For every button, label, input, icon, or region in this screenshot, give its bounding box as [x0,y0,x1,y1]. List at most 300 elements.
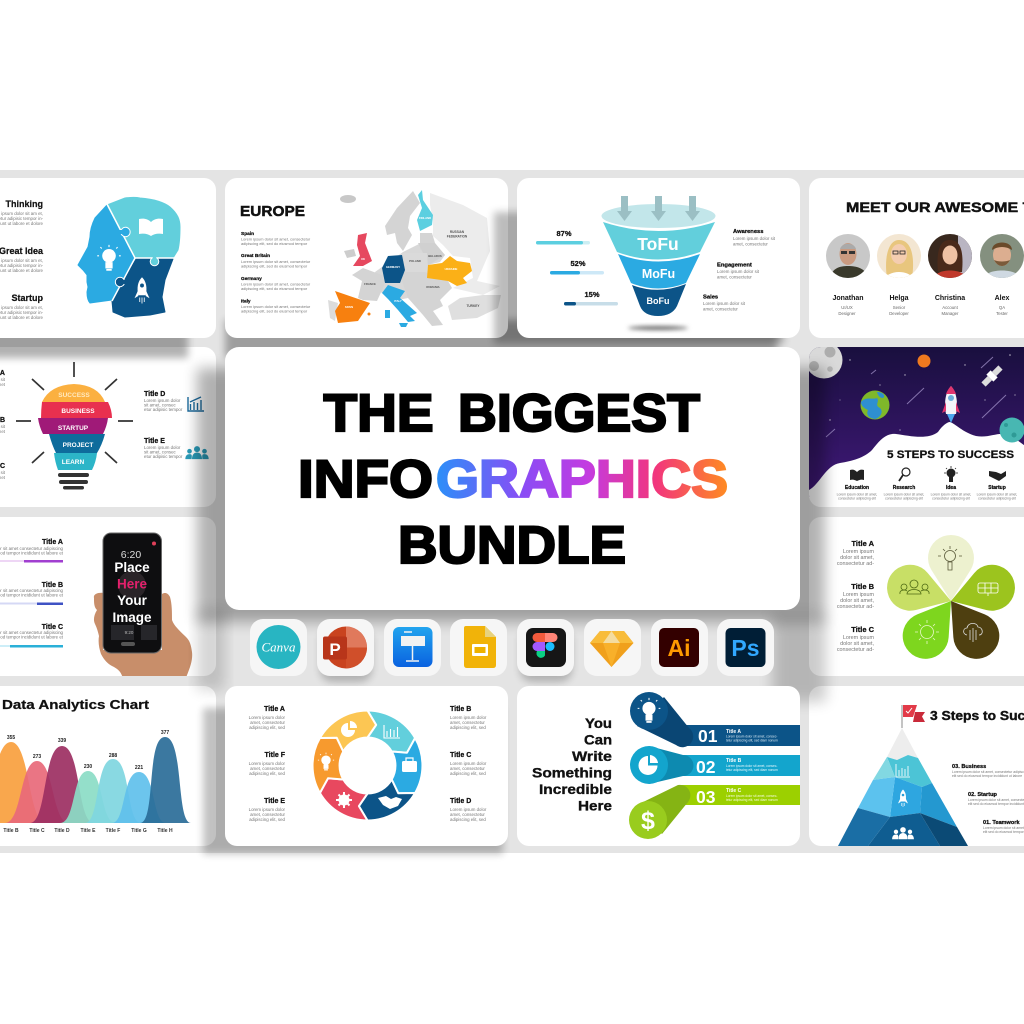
ribbon 03: $ [641,807,655,835]
text: spain [241,231,311,246]
axis labels: Title D [54,828,70,834]
scandinavia [385,191,420,251]
text: great britain: Lorem ipsum dolor sit amet, consectetur [241,259,311,264]
text: germany: Lorem ipsum dolor sit amet, consectetur [241,282,311,286]
text: title A: Lorem ipsum dolor [249,715,286,720]
text: title B: Lorem ipsum dolor [450,715,487,720]
text: title F [249,752,286,776]
text: awareness: Awareness [733,229,764,235]
funnel band: bofu: BoFu [646,296,670,306]
arrows [617,196,700,221]
step: startup: consectetur adipiscing elit [978,496,1016,500]
bulb layer: business [41,402,112,418]
portrait: christina [928,234,972,278]
text: title A: amet, consectetur [250,720,286,725]
axis labels: Title B [3,828,19,834]
headline text: Can [584,732,612,748]
text: awareness: Lorem ipsum dolor sit [733,236,776,241]
country labels [345,216,480,309]
text: title E [249,798,286,822]
planet: orange [918,354,930,368]
step: education [837,470,877,500]
value labels: 221 [135,765,143,771]
turkey [448,295,501,320]
icon: sun [915,620,939,644]
team roles: Developer [889,311,909,316]
value labels: 377 [161,730,169,736]
ribbon 02: 02 [696,757,716,777]
panel: team [809,178,1024,338]
text: title E: Lorem ipsum dolor [249,807,286,812]
text: engagement: amet, consectetur [717,274,752,280]
icon: team [900,580,929,594]
funnel band: mofu: MoFu [642,267,675,281]
icon: idea [938,546,962,570]
text: spain: adipiscing elit, sed do eiusmod tempor [241,241,308,246]
portrait: alex [980,234,1024,278]
text: title C: amet, consectetur [450,766,485,771]
ribbon 02 [630,746,800,784]
text: title B: Title B [851,582,875,591]
step: startup [977,471,1017,500]
progress: 52% [550,259,604,274]
country labels: UK [361,257,365,261]
icon: bar chart [188,397,204,411]
title line 2: gradient part: GRAPHICS [436,450,728,509]
phone body [103,533,162,653]
ukraine [427,256,472,286]
map of europe [328,190,501,327]
country labels: FINLAND [419,216,431,220]
funnel band: tofu [603,222,715,260]
bulb layer: project: PROJECT [63,442,93,449]
text: title B: dolor sit amet, [840,598,874,604]
phone screen text: Your [117,593,148,608]
panel: main title [225,347,800,610]
text: title D: etur adipisic tempor [144,407,183,412]
text: title D: Lorem ipsum dolor [450,807,487,812]
mountain [838,728,968,846]
step: education: Lorem ipsum dolor sit amet, [837,492,877,496]
icon: people [185,446,209,459]
poland and central [403,253,428,278]
panel: space steps [806,342,1024,510]
funnel top ellipse [602,204,716,228]
ribbon 02: Lorem ipsum dolor sit amet, consec- [726,764,777,768]
team roles: Senior [893,305,906,310]
text: title A: Title A [264,706,285,713]
text: title C [450,752,487,776]
planet: teal [1000,418,1024,442]
icon: canva [250,619,307,676]
country labels: FRANCE [364,282,376,286]
text: sales: Lorem ipsum dolor sit [703,301,746,306]
phone screen text: 9:20 [125,630,134,635]
icon: bulb [318,753,334,770]
blue tier [890,777,922,817]
text: business: elit sed do eiusmod tempor incididunt ut labore [952,774,1022,778]
axis labels: Title F [106,828,120,834]
text: italy: Italy [241,298,251,304]
icon: line chart [384,725,400,738]
text: startup [0,293,44,320]
icon: rocket [898,790,908,807]
text: title C: Title C [450,752,471,759]
funnel band: tofu: ToFu [637,234,679,254]
country labels: UKRAINE [445,267,458,271]
text: title B: Title B [450,706,471,713]
icon: handshake [378,796,402,809]
rocket [942,386,960,423]
panel: head puzzle [0,178,216,338]
text: thinking: Thinking [6,199,43,209]
head diagram [78,197,180,317]
country labels: GERMANY [386,265,400,269]
hand holding phone [94,533,192,680]
step: startup: Startup [988,485,1006,491]
text: teamwork: elit sed do eiusmod tempor [983,830,1024,834]
ribbon 01: Title A [726,729,741,735]
text: title E: etur adipisic tempor [144,454,183,459]
text: title A: adipiscing elit, sed [249,725,286,730]
icon: rocket [134,277,150,304]
text: germany [241,276,311,291]
ribbon 01: Lorem ipsum dolor sit amet, consec- [726,734,777,738]
icon: gear [336,792,352,808]
icon: solar panel [978,583,998,596]
planet: earth [860,390,890,420]
ribbon 02: tetur adipiscing elit, sed diam nonum [726,768,778,772]
phone screen text: Image [112,610,152,625]
ribbon 03: tetur adipiscing elit, sed diam nonum [726,798,778,802]
bulb layer: learn [54,453,97,470]
ribbon 02: Title B [726,758,742,764]
icon: powerpoint: P [329,640,341,659]
text: great idea [0,246,44,273]
funnel band: bofu [632,284,686,316]
text: title A [0,539,64,562]
text: germany: adipiscing elit, sed do eiusmod tempor [241,286,308,291]
heading: Data Analytics Chart [2,697,150,712]
text: title F: adipiscing elit, sed [249,771,286,776]
text: title E: sit amet, consec [144,450,177,454]
funnel band: mofu [618,254,700,288]
icon: powerpoint [317,619,374,676]
axis labels: Title E [81,828,96,834]
phone screen text [111,542,157,646]
snow cap [887,728,918,760]
team roles: Designer [838,311,856,316]
ireland [344,249,356,258]
step: idea: consectetur adipiscing elit [932,496,970,500]
text: title C: consectetur ad- [837,647,874,653]
portugal [328,300,338,321]
step: research [884,468,924,500]
text: spain: Spain [241,231,254,237]
bulb layer: startup [38,418,108,434]
text: title B: Title B [42,582,63,589]
title line 1: BIGGEST [458,384,700,443]
team roles: Manager [942,311,959,316]
text: title A: Lorem ipsum [843,549,874,555]
russia [430,193,500,295]
text: title C: Title C [851,625,875,634]
white hill [809,422,1024,497]
spain [335,291,370,323]
text: germany: Germany [241,276,262,282]
icon: keynote [384,619,441,676]
panel: 3 steps mountain [809,686,1024,846]
belarus [418,243,445,266]
text: title E [144,438,183,459]
text: title D: amet, consectetur [450,812,485,817]
petals [881,535,1021,668]
title line 1 [324,384,700,443]
text: title A [837,539,875,567]
axis labels [3,828,173,834]
text: title C [0,624,64,648]
country labels: RUSSIAN [450,230,465,234]
text: engagement: Lorem ipsum dolor sit [717,269,760,274]
bulb layer: project [49,434,105,453]
text: great idea: Great Idea [0,246,44,256]
text: sales [703,294,746,312]
navy tier [868,813,940,846]
text: title C: dolor sit amet, [840,641,874,647]
title line 1: THE [324,384,434,443]
country labels: SPAIN [345,305,353,309]
progress: 15%: 15% [584,290,600,299]
text: startup: 02. Startup [968,792,997,798]
portrait: helga [877,234,921,278]
ribbon 03 [629,785,800,839]
text: title D: Title D [144,391,165,398]
icon: book [139,219,163,236]
text: italy: adipiscing elit, sed do eiusmod tempor [241,308,308,314]
ribbon 03: Lorem ipsum dolor sit amet, consec- [726,794,777,798]
team roles: Tester [996,311,1008,316]
icon: light rays [16,362,133,463]
text: great britain: adipiscing elit, sed do eiusmod tempor [241,264,308,268]
text: awareness [733,229,776,246]
germany [382,255,405,283]
text: title C [837,625,875,653]
white seams [107,204,174,301]
text: startup: Startup [12,293,44,303]
icon: sketch [584,619,641,676]
value labels: 230 [84,764,92,770]
icon: bulb base [58,473,89,490]
panel: phone mockup [0,517,216,680]
panel: europe map [225,178,508,338]
text: italy: Lorem ipsum dolor sit amet, consectetur [241,304,311,309]
headline text [532,715,612,814]
headline text: Here [578,798,612,814]
france [352,268,385,301]
text: teamwork [983,820,1024,834]
country labels: ITALY [394,299,402,303]
progress: 87%: 87% [556,229,572,238]
iceland [340,195,356,203]
text: title A: dolor sit amet, [840,555,874,561]
baltics [420,233,435,250]
axis labels: Title C [29,828,45,834]
text: great britain [241,253,311,268]
phone screen text: 6:20 [121,549,141,561]
panel: data analytics chart [0,686,216,846]
phone screen text: Here [117,576,147,592]
text: title B [450,706,487,730]
funnel card shadow [494,212,784,344]
icon: canva: Canva [262,640,296,654]
text: title F: Title F [265,752,286,759]
value labels: 273 [33,754,41,760]
text: title E: Title E [264,798,285,805]
hand [94,593,192,680]
team roles: UI/UX [841,305,853,310]
text: title A [249,706,286,730]
bulb layer: success [42,384,105,402]
background band [0,170,1024,853]
donut cycle [313,710,422,820]
text: title D [144,391,183,412]
text: title E: amet, consectetur [250,812,286,817]
icon: google slides [450,619,507,676]
step: education: consectetur adipiscing elit [838,496,876,500]
text: startup [968,792,1024,806]
step: research: Lorem ipsum dolor sit amet, [884,492,924,496]
country labels: POLAND [409,259,421,263]
bell chart [0,737,191,823]
ribbon 01: tetur adipiscing elit, sed diam nonum [726,738,778,742]
country labels: TURKEY [466,304,480,308]
text: title B [0,582,64,605]
team roles: QA [999,305,1005,310]
text: title E: Lorem ipsum dolor [144,445,181,450]
icon: bulb [97,245,121,271]
text: title C: Lorem ipsum [843,635,874,641]
title line 2: black part: INFO [298,450,433,509]
text: business [952,764,1024,778]
ribbon 03: Title C [726,788,742,794]
heading: EUROPE [240,203,305,220]
finland [417,190,433,231]
text: title C: Lorem ipsum dolor [450,761,487,766]
moon [809,347,842,378]
icon: cloud [964,623,982,642]
step: idea: Idea [946,485,956,491]
bulb layer: learn: LEARN [62,459,84,466]
step: education: Education [845,485,869,491]
progress: 15% [564,290,618,306]
team names: Jonathan [832,295,864,302]
axis labels: Title H [157,828,173,834]
app icon row [250,619,774,682]
ribbon 03: 03 [696,787,716,807]
text: title D: Lorem ipsum dolor [144,398,181,403]
icon: pie [341,721,357,737]
value labels: 288 [109,753,117,759]
text: title D: Title D [450,798,471,805]
text: title B: Lorem ipsum [843,592,874,598]
ribbon 01: 01 [698,726,718,746]
icon: briefcase [402,758,417,772]
balkans [402,272,452,326]
text: engagement: Engagement [717,262,752,268]
text: title F: amet, consectetur [250,766,286,771]
icon: people [892,827,914,839]
value labels: 339 [58,738,66,744]
panel: lightbulb steps [0,347,216,507]
central landmass [375,240,448,300]
united kingdom [353,233,372,266]
step: idea: Lorem ipsum dolor sit amet, [931,492,971,496]
team names: Helga [889,295,909,302]
tile shadows [320,628,372,682]
heading: 5 STEPS TO SUCCESS [887,449,1014,461]
icon: flag [902,705,925,728]
headline text: Incredible [539,781,612,797]
text: title B: adipiscing elit, sed [450,725,486,730]
text: clipped titles [0,370,6,480]
text: title E: Title E [144,438,165,445]
bulb layer: business: BUSINESS [61,408,95,415]
text: teamwork: Lorem ipsum dolor sit amet [983,826,1024,830]
text: teamwork: 01. Teamwork [983,820,1020,826]
country labels: BELARUS [428,254,442,258]
satellite [981,365,1002,387]
icon: photoshop [717,619,774,676]
country labels: ROMANIA [426,285,440,289]
panel: circle cycle [225,686,508,846]
text: title A: Title A [851,539,875,548]
team names [832,295,1009,302]
team names: Christina [935,295,965,302]
bulb layer: startup: STARTUP [58,425,89,432]
text: title A: consectetur ad- [837,561,874,567]
team roles: Account [942,305,959,310]
progress: 87% [536,229,590,244]
shadows cast between panels [0,326,188,358]
headline text: Something [532,764,612,780]
bulb layer: success: SUCCESS [58,392,90,399]
phone screen text: Place [114,560,150,575]
value labels: 355 [7,735,15,741]
portrait: jonathan [826,234,870,278]
text: business: 03. Business [952,764,986,770]
text: sales: Sales [703,294,718,300]
text: great britain: Great Britain [241,253,270,259]
title line 3: BUNDLE [398,516,626,575]
text: title C: Title C [42,624,63,631]
team roles [838,305,1008,316]
text: title D: sit amet, consec [144,402,177,408]
piece: crown [107,197,180,258]
funnel floor shadow [628,326,688,330]
step: research: consectetur adipiscing elit [885,496,923,500]
text: title B: consectetur ad- [837,604,874,610]
panel: funnel [517,178,800,338]
text: title D: adipiscing elit, sed [450,817,486,822]
country labels: FEDERATION [447,234,468,238]
piece: neck [112,259,173,317]
step: research: Research [893,485,915,491]
headline text: You [585,715,612,731]
text: title C: adipiscing elit, sed [450,771,486,776]
ribbon 01 [630,692,800,747]
panel: petal diagram [809,517,1024,676]
puzzle knobs [115,227,159,287]
